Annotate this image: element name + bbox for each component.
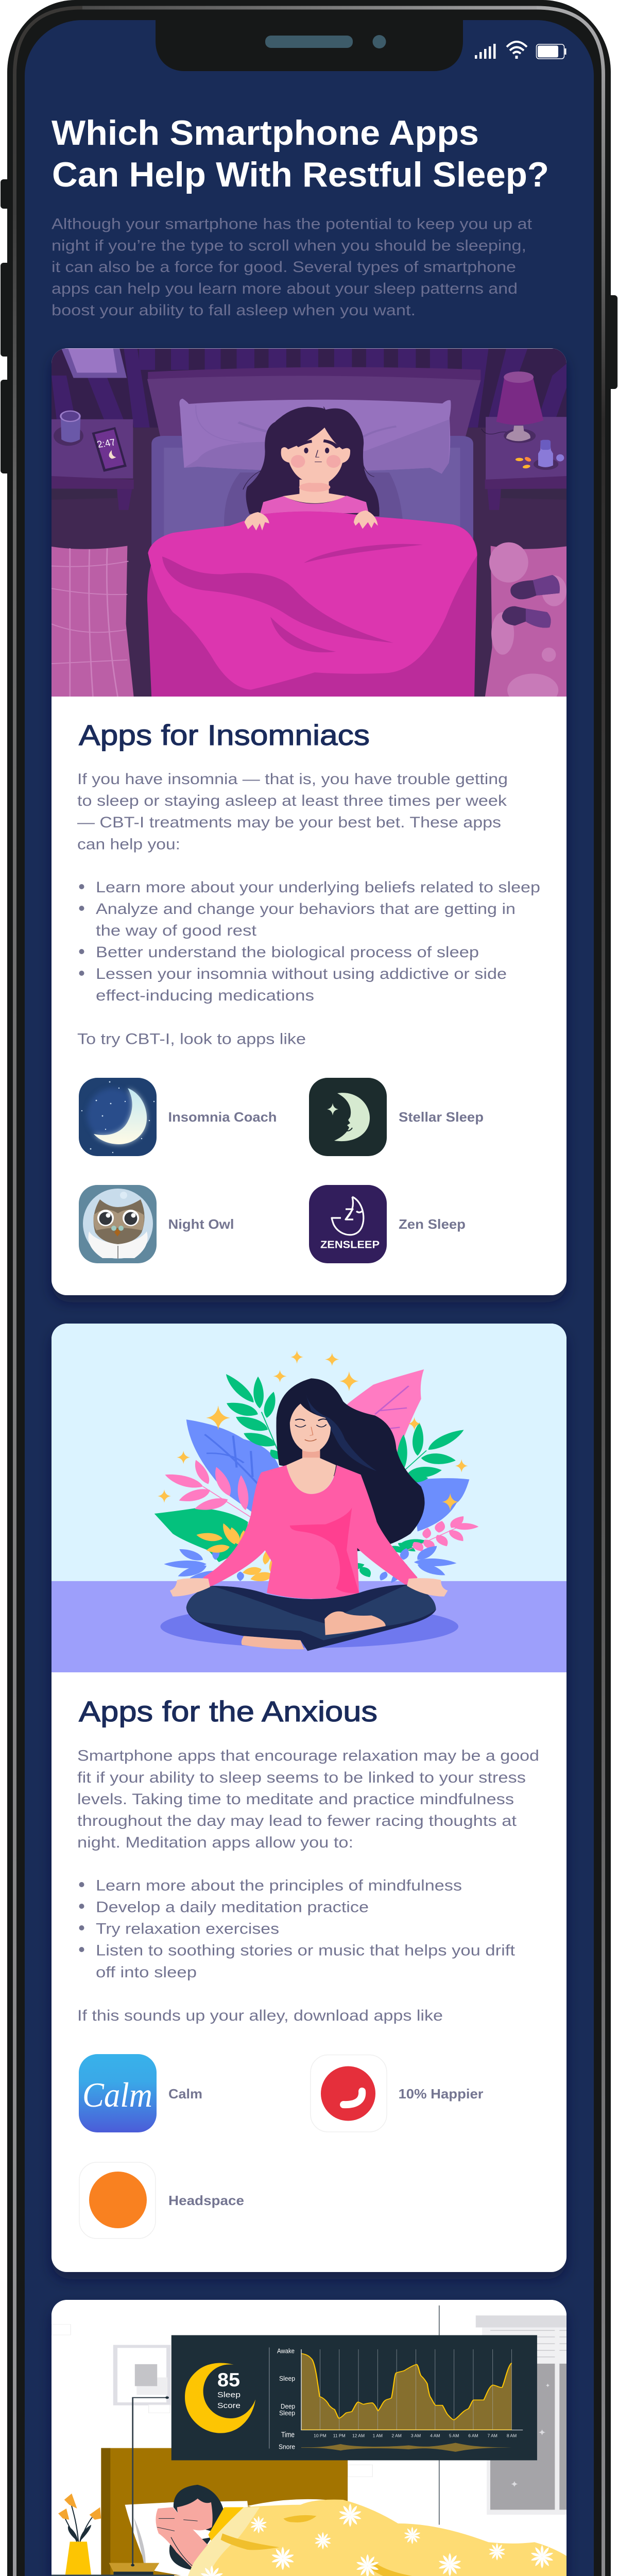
- chart axis labels: 1 AM: [373, 2433, 383, 2438]
- pink leaf: [347, 1369, 424, 1458]
- illustration: woman awake in bed: [52, 349, 566, 707]
- icon: calm: Calm: [82, 2075, 152, 2114]
- chart axis labels: 12 AM: [352, 2433, 365, 2438]
- lamp: [109, 2396, 169, 2575]
- bullet list: Analyze and change your behaviors that are getting in: [96, 901, 516, 918]
- window: [476, 2315, 566, 2515]
- label: night owl: Night Owl: [168, 1216, 234, 1232]
- sleep score text: Score: [217, 2401, 241, 2410]
- heading: Apps for Insomniacs: [79, 719, 370, 751]
- body text: — CBT-I treatments may be your best bet. These apps: [77, 814, 501, 831]
- icon: insomnia coach: [79, 1078, 157, 1156]
- label: headspace: Headspace: [168, 2193, 244, 2208]
- panel: apps for the anxious: [52, 1324, 566, 2272]
- blue sprigs: [164, 1543, 457, 1585]
- body text: fit if your ability to sleep seems to be linked to your stress: [77, 1769, 526, 1786]
- sleep score text: Sleep: [217, 2391, 241, 2399]
- chart axis labels: 3 AM: [411, 2433, 421, 2438]
- intro text: [52, 215, 533, 319]
- body text: throughout the day may lead to fewer racing thoughts at: [77, 1812, 517, 1829]
- headboard: [101, 2448, 348, 2575]
- icon: wifi: [507, 42, 527, 59]
- chart axis labels: 7 AM: [488, 2433, 497, 2438]
- body text: [77, 771, 508, 853]
- icon: night owl: [79, 1185, 157, 1263]
- hands: [170, 1578, 210, 1597]
- yellow sprigs: [197, 1523, 272, 1582]
- bullet list: Better understand the biological process of sleep: [96, 944, 479, 961]
- label: zen sleep: Zen Sleep: [399, 1216, 466, 1232]
- green sprigs: [154, 1372, 468, 1586]
- sleeping woman: [156, 2485, 244, 2570]
- body text: levels. Taking time to meditate and practice mindfulness: [77, 1791, 514, 1808]
- daisies: [200, 2503, 562, 2576]
- bullet list: the way of good rest: [96, 922, 257, 939]
- body text: Smartphone apps that encourage relaxation may be a good: [77, 1748, 539, 1764]
- nightstand: [52, 2574, 174, 2576]
- chart panel: [171, 2335, 537, 2460]
- bullet list: effect-inducing medications: [96, 987, 314, 1004]
- chart axis labels: Deep: [281, 2402, 295, 2410]
- vase and flowers: [58, 2494, 101, 2574]
- bullet list: Try relaxation exercises: [96, 1921, 279, 1937]
- label: 10% happier: 10% Happier: [399, 2086, 483, 2102]
- legs: [186, 1585, 436, 1651]
- icon: 10% happier: [311, 2055, 387, 2132]
- intro text: boost your ability to fall asleep when you want.: [52, 302, 416, 319]
- body text: [77, 1748, 539, 1851]
- panel: apps for the data-driven: [52, 2300, 566, 2576]
- chart axis labels: 6 AM: [468, 2433, 478, 2438]
- bullet list: Lessen your insomnia without using addictive or side: [96, 965, 507, 982]
- icon: headspace: [79, 2162, 156, 2239]
- body text: night. Meditation apps allow you to:: [77, 1834, 353, 1851]
- intro text: apps can help you learn more about your sleep patterns and: [52, 280, 518, 297]
- chart axis labels: Sleep: [279, 2409, 295, 2417]
- icon: stellar sleep: [309, 1078, 387, 1156]
- chart axis labels: Time: [281, 2431, 295, 2439]
- bullet list: Learn more about the principles of mindfulness: [96, 1877, 462, 1894]
- label: calm: Calm: [168, 2086, 202, 2102]
- intro text: Although your smartphone has the potential to keep you up at: [52, 215, 533, 233]
- title: Which Smartphone Apps: [52, 113, 479, 152]
- title: Can Help With Restful Sleep?: [52, 155, 549, 194]
- card background: [52, 1324, 566, 2272]
- chart axis labels: [277, 2347, 517, 2450]
- chart axis labels: 10 PM: [314, 2433, 327, 2438]
- chart axis labels: 4 AM: [430, 2433, 440, 2438]
- chart axis labels: Sleep: [279, 2375, 295, 2382]
- body text: If you have insomnia — that is, you have trouble getting: [77, 771, 508, 788]
- sleep chart: [185, 2349, 523, 2433]
- blue leaves: [186, 1419, 469, 1531]
- icon: calm: [79, 2054, 157, 2132]
- body text: can help you:: [77, 836, 180, 853]
- sleep score text: 85: [217, 2369, 240, 2391]
- shirt: [203, 1465, 418, 1599]
- chart axis labels: 2 AM: [392, 2433, 402, 2438]
- label: insomnia coach: Insomnia Coach: [168, 1109, 277, 1125]
- chart axis labels: Snore: [279, 2443, 295, 2450]
- title: [52, 113, 549, 194]
- call to action text: If this sounds up your alley, download apps like: [77, 2007, 443, 2024]
- label: stellar sleep: Stellar Sleep: [399, 1109, 484, 1125]
- bullet list: Learn more about your underlying beliefs related to sleep: [96, 879, 540, 896]
- snore wave: [301, 2443, 511, 2452]
- hair: [276, 1378, 425, 1551]
- face and chest: [286, 1403, 336, 1494]
- notch: [156, 20, 463, 71]
- chart axis labels: 5 AM: [449, 2433, 459, 2438]
- icon: zen sleep: ZENSLEEP: [320, 1240, 380, 1251]
- bullet list: off into sleep: [96, 1964, 197, 1981]
- icon: zen sleep: [309, 1185, 387, 1263]
- illustration: woman awake in bed: 2:47: [96, 437, 117, 450]
- pillow: [125, 2501, 248, 2576]
- intro text: it can also be a force for good. Several types of smartphone: [52, 259, 516, 276]
- bullet list: [79, 879, 540, 1004]
- body text: to sleep or staying asleep at least three times per week: [77, 792, 507, 809]
- sparkles: [158, 1350, 468, 1511]
- icon: battery: [537, 44, 566, 59]
- card background: [52, 2300, 566, 2576]
- card background: [52, 348, 566, 1295]
- bullet list: [79, 1877, 516, 1981]
- speaker: [265, 36, 353, 48]
- heading: Apps for the Anxious: [79, 1695, 377, 1727]
- feet: [324, 1612, 386, 1635]
- chart axis labels: 8 AM: [507, 2433, 517, 2438]
- bullet list: Develop a daily meditation practice: [96, 1899, 369, 1916]
- blanket: [172, 2500, 566, 2576]
- pink sprigs: [162, 1459, 478, 1553]
- camera: [373, 35, 386, 48]
- chart axis labels: Awake: [277, 2347, 295, 2354]
- side buttons: [1, 179, 617, 473]
- icon: signal: [475, 44, 495, 59]
- illustration: woman sleeping with sleep score chart: [52, 2300, 566, 2576]
- bullet list: Listen to soothing stories or music that helps you drift: [96, 1942, 516, 1959]
- call to action text: To try CBT-I, look to apps like: [77, 1030, 306, 1048]
- intro text: night if you’re the type to scroll when you should be sleeping,: [52, 237, 526, 255]
- illustration: woman meditating: [52, 1324, 566, 1673]
- panel: apps for insomniacs: [52, 348, 566, 1295]
- chart axis labels: 11 PM: [333, 2433, 346, 2438]
- sleep score text: [217, 2369, 241, 2410]
